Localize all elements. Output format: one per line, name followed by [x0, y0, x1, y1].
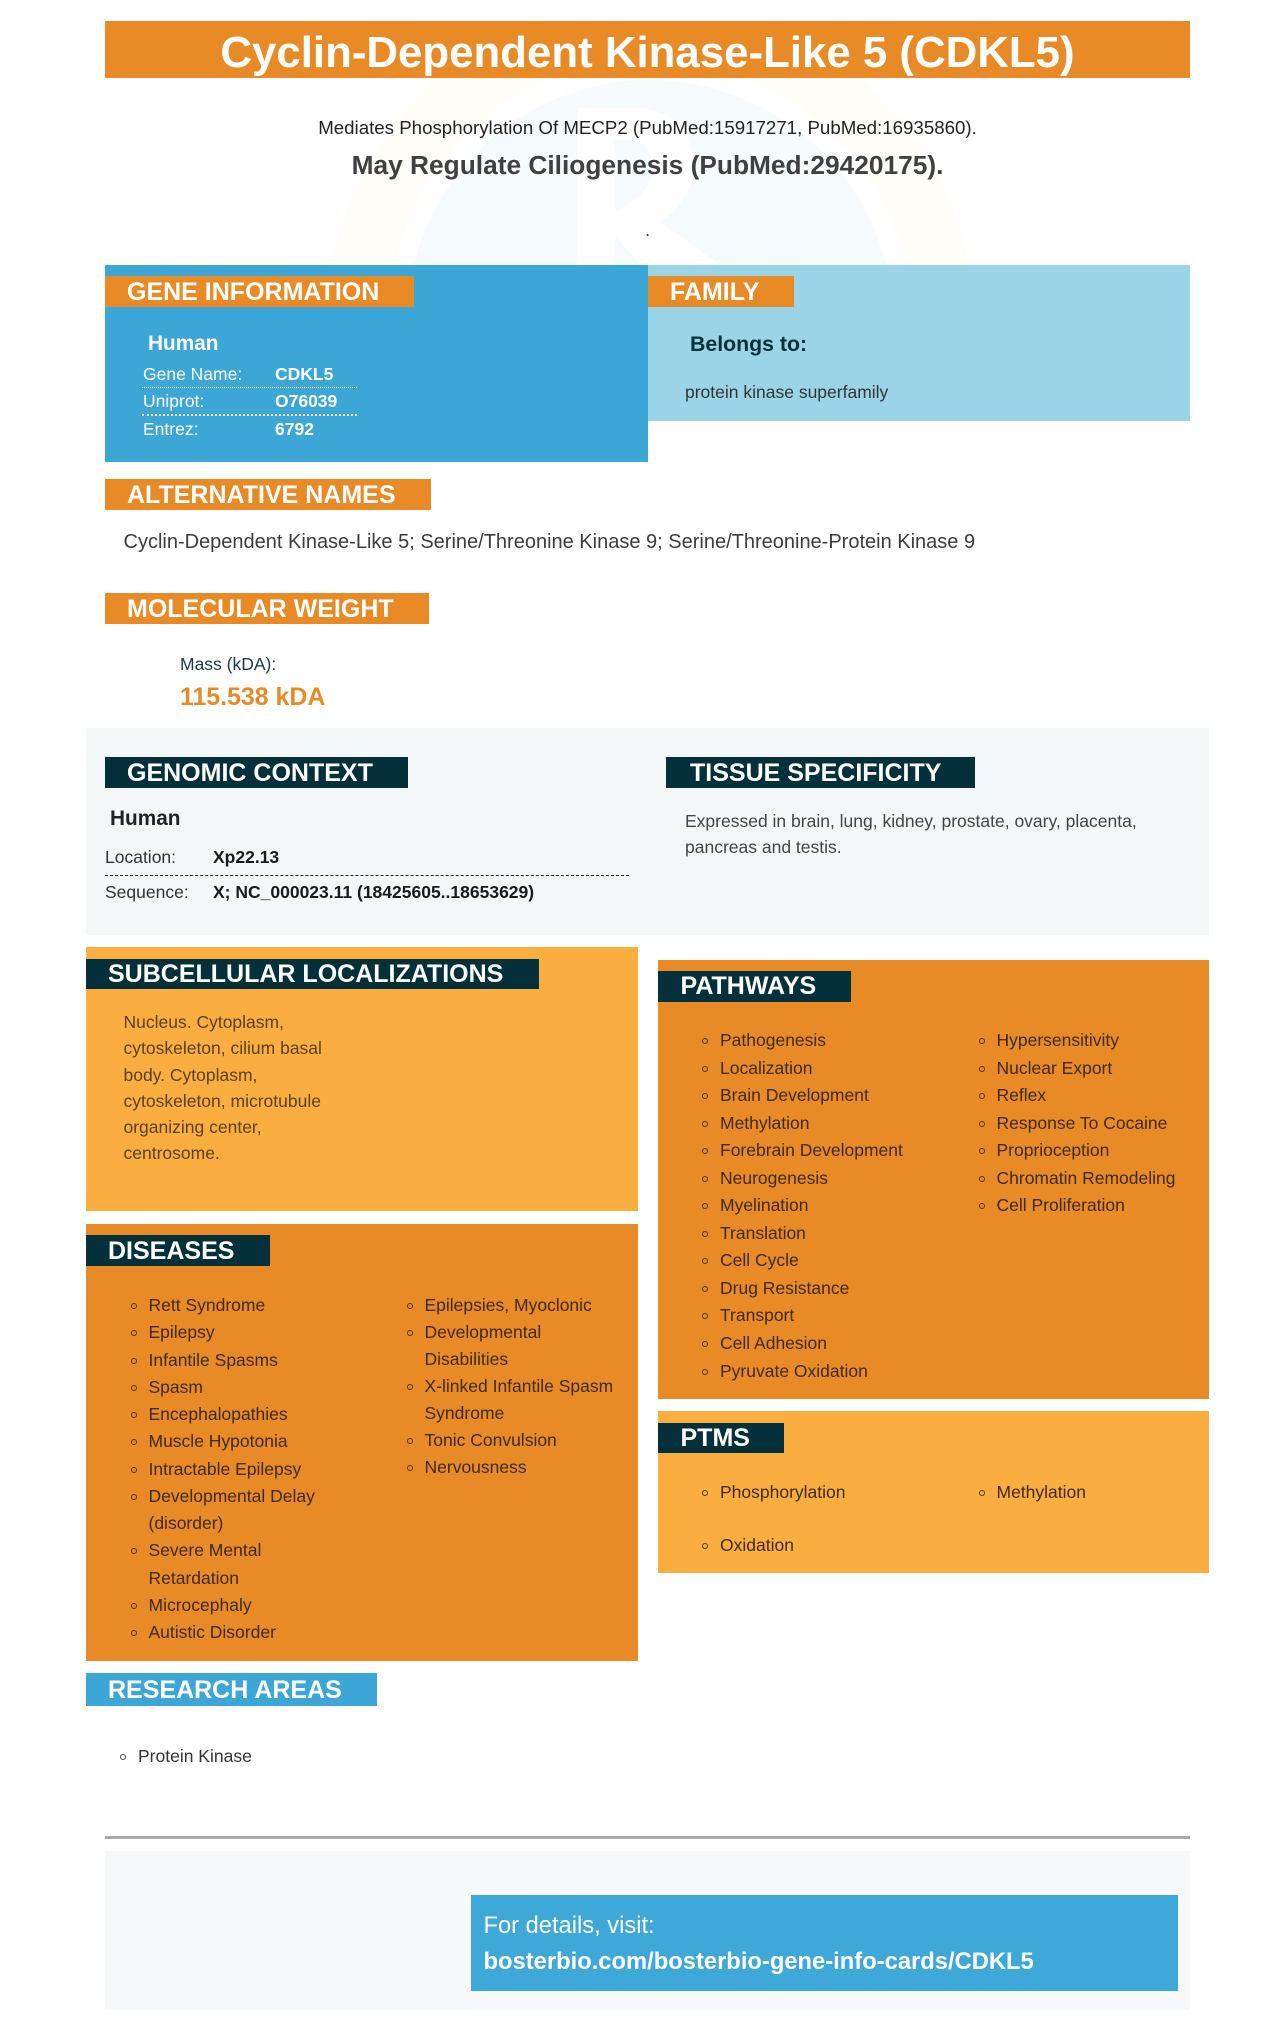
pathway list column two: Response To Cocaine — [996, 1113, 1167, 1133]
heading: research areas — [86, 1673, 377, 1706]
disease list column one: Infantile Spasms — [148, 1350, 278, 1370]
heading: family: FAMILY — [670, 278, 759, 306]
belongs to label: Belongs to: — [690, 332, 807, 356]
panel: family — [648, 265, 1190, 421]
disease list column one: Microcephaly — [148, 1595, 252, 1615]
disease list column one: Intractable Epilepsy — [148, 1458, 301, 1478]
heading: PTMs — [658, 1423, 784, 1453]
heading: gene information: GENE INFORMATION — [127, 278, 379, 306]
disease list column two: Syndrome — [424, 1403, 504, 1423]
disease list column two: Epilepsies, Myoclonic — [424, 1295, 592, 1315]
pathway list column two: Chromatin Remodeling — [996, 1168, 1175, 1188]
sequence row: X; NC_000023.11 (18425605..18653629) — [213, 882, 534, 902]
pathway list column one: Cell Adhesion — [720, 1333, 827, 1353]
pathway list column one: Translation — [720, 1223, 806, 1243]
pathway list column one: Neurogenesis — [720, 1168, 828, 1188]
heading: research areas: RESEARCH AREAS — [108, 1676, 342, 1704]
title banner — [105, 21, 1190, 78]
disease list column one: Autistic Disorder — [148, 1622, 276, 1642]
gene table: CDKL5 — [275, 364, 333, 384]
disease list column one: (disorder) — [148, 1513, 223, 1533]
family value: protein kinase superfamily — [685, 382, 888, 402]
sequence row: Sequence: — [105, 882, 189, 902]
species label: Human — [148, 332, 218, 355]
tissue text: pancreas and testis. — [685, 837, 842, 857]
heading: molecular weight: MOLECULAR WEIGHT — [127, 595, 394, 623]
heading: tissue specificity: TISSUE SPECIFICITY — [690, 759, 941, 787]
panel: PTMs — [658, 1411, 1209, 1573]
pathway list column one: Transport — [720, 1305, 794, 1325]
summary line one: Mediates Phosphorylation Of MECP2 (PubMed:15917271, PubMed:16935860). — [318, 117, 977, 138]
summary dot: . — [645, 220, 650, 240]
disease list column one: Rett Syndrome — [148, 1295, 265, 1315]
mass value: 115.538 kDA — [180, 683, 325, 711]
disease list column two: Developmental — [424, 1322, 541, 1342]
pathway list column one: Forebrain Development — [720, 1140, 903, 1160]
heading: diseases — [86, 1235, 270, 1266]
disease list column two: Nervousness — [424, 1457, 527, 1477]
localization text: Nucleus. Cytoplasm, — [124, 1012, 284, 1032]
disease list column one: Encephalopathies — [148, 1404, 288, 1424]
panel: gene information — [105, 265, 648, 462]
heading: genomic context: GENOMIC CONTEXT — [127, 759, 373, 787]
pathway list column two: Reflex — [996, 1085, 1046, 1105]
gene table: O76039 — [275, 391, 337, 411]
pathway list column one: Methylation — [720, 1113, 810, 1133]
gene table: Uniprot: — [143, 391, 204, 411]
callout: details link — [471, 1895, 1178, 1991]
summary line two: May Regulate Ciliogenesis (PubMed:29420175). — [352, 150, 943, 180]
localization text: cytoskeleton, microtubule — [124, 1091, 321, 1111]
panel: footer — [105, 1851, 1190, 2010]
localization text: body. Cytoplasm, — [124, 1065, 257, 1085]
panel: genomic context and tissue specificity — [86, 728, 1209, 935]
disease list column two: X-linked Infantile Spasm — [424, 1376, 613, 1396]
watermark logo — [414, 80, 886, 265]
pathway list column one: Drug Resistance — [720, 1278, 849, 1298]
pathway list column one: Myelination — [720, 1195, 809, 1215]
heading: diseases: DISEASES — [108, 1237, 234, 1265]
panel: diseases — [86, 1224, 638, 1661]
pathway list column two: Proprioception — [996, 1140, 1109, 1160]
disease list column two: Disabilities — [424, 1349, 508, 1369]
tissue text — [685, 811, 1137, 857]
disease list column one: Muscle Hypotonia — [148, 1431, 288, 1451]
heading: family — [648, 276, 794, 307]
pathway list column two — [979, 1030, 1175, 1215]
heading: alternative names: ALTERNATIVE NAMES — [127, 481, 396, 509]
disease list column one: Spasm — [148, 1377, 203, 1397]
heading: subcellular localizations: SUBCELLULAR LOCALIZATIONS — [108, 960, 503, 988]
pathway list column one: Cell Cycle — [720, 1250, 799, 1270]
pathway list column one: Localization — [720, 1058, 812, 1078]
alternative names text: Cyclin-Dependent Kinase-Like 5; Serine/Threonine Kinase 9; Serine/Threonine-Protein Kinase 9 — [124, 531, 975, 553]
disease list column two — [407, 1295, 613, 1477]
localization text: organizing center, — [124, 1117, 262, 1137]
PTM phosphorylation: Phosphorylation — [720, 1482, 846, 1502]
pathway list column two: Hypersensitivity — [996, 1030, 1119, 1050]
heading: pathways: PATHWAYS — [680, 972, 816, 1000]
mass label: Mass (kDA): — [180, 654, 276, 674]
pathway list column two: Nuclear Export — [996, 1058, 1112, 1078]
gene table: 6792 — [275, 419, 314, 439]
panel: subcellular localizations — [86, 947, 638, 1211]
location row — [105, 847, 279, 867]
pathway list column one: Brain Development — [720, 1085, 869, 1105]
localization text: centrosome. — [124, 1143, 220, 1163]
pathway list column two: Cell Proliferation — [996, 1195, 1125, 1215]
gene table: Entrez: — [143, 419, 198, 439]
heading: pathways — [658, 971, 851, 1002]
tissue text: Expressed in brain, lung, kidney, prostate, ovary, placenta, — [685, 811, 1137, 831]
location row: Location: — [105, 847, 176, 867]
localization text: cytoskeleton, cilium basal — [124, 1038, 322, 1058]
heading: PTMs: PTMS — [680, 1424, 750, 1452]
disease list column one — [131, 1295, 315, 1642]
gene table — [142, 364, 357, 439]
panel: pathways — [658, 960, 1209, 1399]
disease list column one: Retardation — [148, 1568, 239, 1588]
research area list: Protein Kinase — [138, 1746, 252, 1766]
gene table: Gene Name: — [143, 364, 242, 384]
disease list column one: Epilepsy — [148, 1322, 215, 1342]
location row: Xp22.13 — [213, 847, 279, 867]
pathway list column one: Pathogenesis — [720, 1030, 826, 1050]
callout url: bosterbio.com/bosterbio-gene-info-cards/CDKL5 — [484, 1948, 1034, 1975]
disease list column one: Developmental Delay — [148, 1486, 315, 1506]
species label: Human — [110, 807, 180, 830]
callout label: For details, visit: — [484, 1913, 655, 1939]
disease list column one: Severe Mental — [148, 1540, 261, 1560]
localization text — [124, 1012, 322, 1163]
PTM methylation: Methylation — [996, 1482, 1086, 1502]
pathway list column one: Pyruvate Oxidation — [720, 1361, 868, 1381]
disease list column two: Tonic Convulsion — [424, 1430, 557, 1450]
title banner: Cyclin-Dependent Kinase-Like 5 (CDKL5) — [220, 28, 1075, 77]
pathway list column one — [702, 1030, 903, 1381]
PTM oxidation: Oxidation — [720, 1535, 794, 1555]
